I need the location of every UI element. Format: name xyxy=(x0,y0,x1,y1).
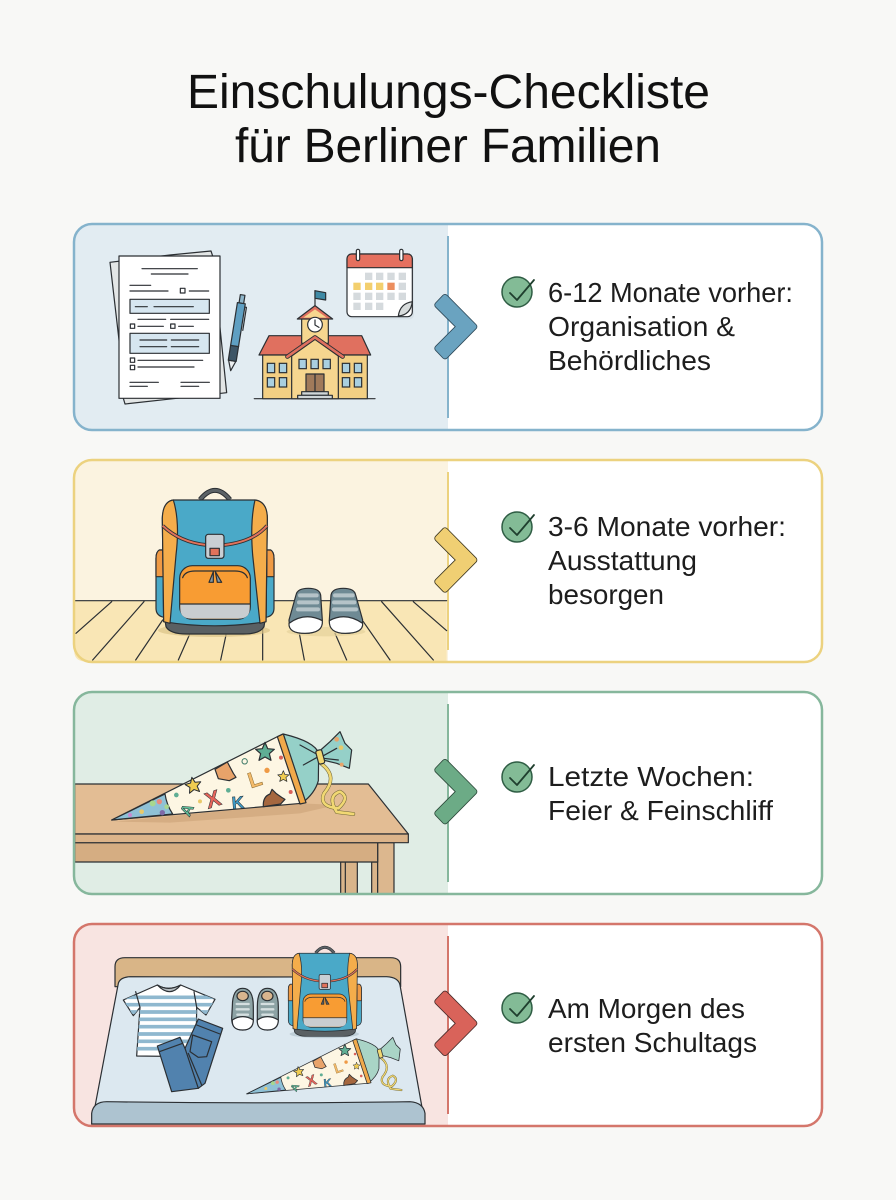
checklist item: 3-6 Monate vorher: besorgen xyxy=(548,579,664,610)
checklist item: 3-6 Monate vorher: Ausstattung xyxy=(548,545,697,576)
icon: jeans xyxy=(157,1019,223,1092)
wooden floor xyxy=(74,601,447,662)
icon: Schultüte: L xyxy=(332,1058,345,1076)
checklist item: Letzte Wochen xyxy=(502,761,773,826)
title xyxy=(187,66,710,173)
arrow: green chevron xyxy=(438,762,474,821)
checklist item: Am Morgen des ersten Schultags xyxy=(502,993,757,1058)
panel: Am Morgen des ersten Schultags xyxy=(74,924,822,1126)
arrow: yellow chevron xyxy=(438,531,474,589)
checklist item: 6-12 Monate vorher: Organisation & xyxy=(548,311,735,342)
illustration: items laid out on a bed xyxy=(92,947,474,1124)
illustration: school backpack and shoes on a wooden floor xyxy=(74,490,474,662)
icon: Schultüte: X xyxy=(201,784,224,814)
checklist item: 6-12 Monate vorher: Behördliches xyxy=(548,345,711,376)
icon: form documents xyxy=(110,251,227,404)
icon: striped t-shirt xyxy=(120,985,217,1057)
icon: Schultüte: A xyxy=(178,801,198,819)
icon: Schultüte xyxy=(247,1037,401,1094)
icon: backpack xyxy=(288,947,361,1038)
checklist item: 6-12 Monate vorher: 6-12 Monate vorher: xyxy=(548,277,793,308)
checklist item: Letzte Wochen: Letzte Wochen: xyxy=(548,761,754,792)
icon: Schultüte: L xyxy=(245,765,265,793)
icon: Schultüte: A xyxy=(289,1082,302,1093)
icon: school building xyxy=(254,291,375,399)
icon: sneakers top view xyxy=(232,988,278,1030)
icon: backpack xyxy=(156,490,274,637)
icon: Schultüte: X xyxy=(305,1072,319,1091)
checklist item: 3-6 Monate vorher xyxy=(502,511,786,610)
bed xyxy=(92,958,425,1124)
checklist item: 3-6 Monate vorher: 3-6 Monate vorher: xyxy=(548,511,786,542)
icon: Schultüte xyxy=(112,732,353,820)
checklist item: Am Morgen des ersten Schultags: Am Morgen des xyxy=(548,993,745,1024)
illustration: documents, pen, school and calendar xyxy=(110,249,474,404)
checklist item: 6-12 Monate vorher xyxy=(502,277,793,376)
checklist item: Am Morgen des ersten Schultags: ersten Schultags xyxy=(548,1027,757,1058)
panel: Letzte Wochen xyxy=(74,692,822,894)
icon: pair of sneakers xyxy=(287,588,365,636)
checklist item: Letzte Wochen: Feier & Feinschliff xyxy=(548,795,773,826)
icon: calendar xyxy=(347,249,414,319)
title: Einschulungs-Checkliste xyxy=(187,66,710,119)
illustration: Schultüte on a table xyxy=(75,732,474,894)
arrow: blue chevron xyxy=(438,297,474,356)
icon: Schultüte: K xyxy=(231,792,246,813)
table xyxy=(75,784,408,894)
title: für Berliner Familien xyxy=(235,120,661,173)
panel: 6-12 Monate vorher xyxy=(74,224,822,430)
icon: Schultüte: K xyxy=(323,1077,332,1090)
icon: pen xyxy=(227,294,248,372)
arrow: red chevron xyxy=(438,994,474,1053)
panel: 3-6 Monate vorher xyxy=(74,460,822,662)
